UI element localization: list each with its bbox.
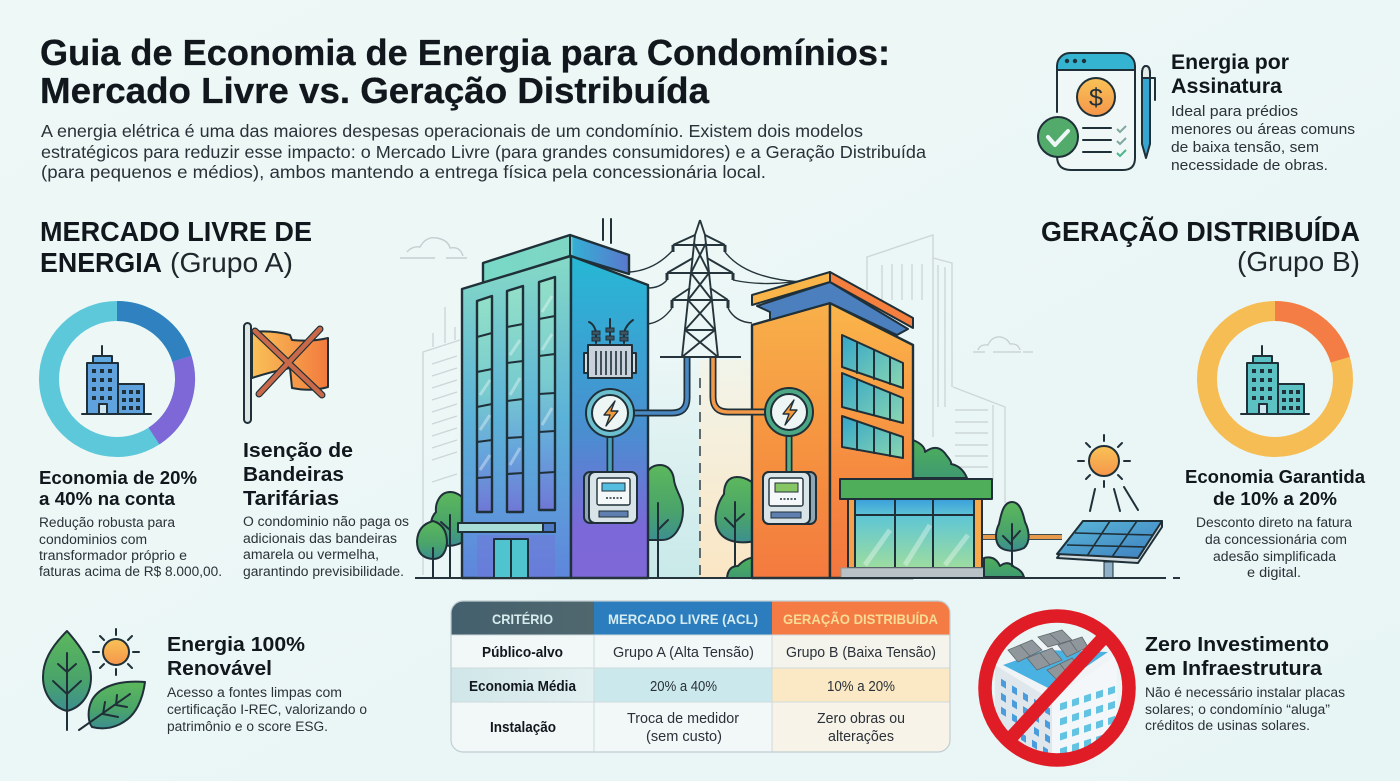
background buildings left bbox=[423, 307, 460, 575]
row: Economia Média: 10% a 20% bbox=[827, 679, 895, 695]
text block: Economia Garantida: adesão simplificada bbox=[1213, 549, 1336, 564]
windows row 1 bbox=[842, 335, 903, 388]
text block: Isenção de Bandeiras: adicionais das bandeiras bbox=[243, 531, 397, 546]
text block: Economia 20 a 40: faturas acima de R$ 8.000,00. bbox=[39, 564, 222, 579]
row: Instalação: Instalação bbox=[490, 720, 556, 736]
donut chart: Geração Distribuída bbox=[1207, 311, 1343, 447]
blue pipe to tower bbox=[610, 358, 687, 472]
windows column 2 bbox=[507, 286, 523, 512]
tree: middle right bbox=[716, 477, 760, 578]
text block: Energia por Assinatura bbox=[1171, 51, 1355, 174]
icon: blue buildings bbox=[82, 346, 151, 414]
text block: Energia por Assinatura: Ideal para prédios bbox=[1171, 104, 1298, 120]
central illustration: buildings and grid bbox=[400, 219, 1180, 578]
text block: Zero Investimento bbox=[1145, 634, 1345, 733]
tree: left rear bbox=[431, 492, 466, 578]
icon: subscription document bbox=[1038, 53, 1155, 170]
cloud left bbox=[400, 238, 467, 258]
text block: Isenção de Bandeiras: amarela ou vermelha, bbox=[243, 547, 379, 562]
entrance canopy bbox=[458, 523, 555, 578]
windows column 3 bbox=[539, 277, 555, 510]
heading: Geração Distribuída: (Grupo B) bbox=[1237, 246, 1360, 277]
transmission tower bbox=[660, 220, 741, 357]
row: Instalação: Troca de medidor bbox=[627, 711, 739, 727]
intro paragraph: A energia elétrica é uma das maiores despesas operacionais de um condomínio. Existem dois modelos bbox=[41, 121, 863, 141]
storefront bbox=[840, 479, 992, 578]
orange pipe to tower bbox=[713, 358, 789, 472]
windows column 1 bbox=[477, 296, 492, 512]
text block: Isenção de Bandeiras bbox=[243, 439, 409, 579]
icon: transformer bbox=[584, 319, 636, 378]
power lines bbox=[630, 250, 815, 324]
tree: right bbox=[996, 502, 1029, 566]
row: Instalação bbox=[490, 711, 905, 745]
text block: Isenção de Bandeiras: O condominio não paga os bbox=[243, 514, 409, 529]
solar connection cable bbox=[983, 534, 1062, 540]
side tint panels bbox=[648, 360, 752, 578]
bush behind store bbox=[913, 440, 967, 478]
intro paragraph: (para pequenos e médios), ambos mantendo a entrega física pela concessionária local. bbox=[41, 162, 766, 182]
text block: Zero Investimento: solares; o condomínio “aluga” bbox=[1145, 702, 1330, 717]
windows row 2 bbox=[842, 373, 903, 423]
intro paragraph: estratégicos para reduzir esse impacto: o Mercado Livre (para grandes consumidores) e a Geração Distribuída bbox=[41, 142, 926, 162]
table header row bbox=[492, 610, 938, 627]
table header row: GERAÇÃO DISTRIBUÍDA bbox=[783, 610, 938, 627]
text block: Isenção de Bandeiras: garantindo previsibilidade. bbox=[243, 564, 404, 579]
blue building bbox=[458, 219, 648, 578]
text block: Economia 20 a 40: Economia de 20% bbox=[39, 468, 197, 488]
tree: middle left bbox=[640, 465, 683, 578]
icon: crossed-out flag bbox=[244, 323, 328, 423]
text block: Zero Investimento: em Infraestrutura bbox=[1145, 658, 1323, 680]
text block: Economia Garantida bbox=[1185, 467, 1366, 580]
windows row 3 bbox=[842, 416, 903, 458]
text block: Economia Garantida: da concessionária com bbox=[1205, 532, 1347, 547]
text block: Energia 100% Renovável: Acesso a fontes limpas com bbox=[167, 685, 342, 700]
text block: Isenção de Bandeiras: Bandeiras bbox=[243, 463, 344, 486]
row: Público-alvo: Público-alvo bbox=[482, 645, 563, 661]
text block: Energia 100% Renovável: patrimônio e o score ESG. bbox=[167, 719, 328, 734]
row: Instalação: alterações bbox=[828, 729, 894, 745]
heading: Geração Distribuída: GERAÇÃO DISTRIBUÍDA bbox=[1041, 216, 1360, 247]
text block: Energia por Assinatura: Assinatura bbox=[1171, 75, 1282, 98]
heading: Mercado Livre de Energia: MERCADO LIVRE DE bbox=[40, 216, 312, 247]
text block: Economia Garantida: de 10% a 20% bbox=[1213, 489, 1337, 509]
intro paragraph bbox=[41, 121, 926, 182]
heading: Geração Distribuída bbox=[1041, 216, 1360, 277]
text block: Economia 20 a 40: condominios com bbox=[39, 532, 147, 547]
heading: Mercado Livre de Energia bbox=[40, 216, 312, 278]
ground line bbox=[415, 577, 1180, 579]
icon: prohibited rooftop solar bbox=[985, 616, 1129, 775]
text block: Isenção de Bandeiras: Isenção de bbox=[243, 439, 353, 462]
row: Instalação: Zero obras ou bbox=[817, 711, 905, 727]
row: Instalação: (sem custo) bbox=[646, 729, 722, 745]
row: Público-alvo bbox=[482, 645, 936, 661]
row: Economia Média: 20% a 40% bbox=[650, 679, 717, 695]
comparison table bbox=[451, 601, 950, 752]
text block: Energia por Assinatura: Energia por bbox=[1171, 51, 1289, 74]
table header row: MERCADO LIVRE (ACL) bbox=[608, 611, 758, 627]
cloud right bbox=[973, 337, 1033, 352]
text block: Isenção de Bandeiras: Tarifárias bbox=[243, 487, 339, 510]
text block: Energia por Assinatura: necessidade de obras. bbox=[1171, 158, 1328, 174]
text block: Energia 100% Renovável: Energia 100% bbox=[167, 634, 305, 656]
table header row: CRITÉRIO bbox=[492, 611, 553, 627]
text block: Energia 100% Renovável bbox=[167, 634, 367, 734]
icon: blue electric meter bbox=[584, 472, 637, 523]
text block: Economia Garantida: Desconto direto na fatura bbox=[1196, 515, 1353, 530]
text block: Energia por Assinatura: de baixa tensão, sem bbox=[1171, 140, 1319, 156]
text block: Economia 20 a 40 bbox=[39, 468, 222, 579]
text block: Economia 20 a 40: a 40% na conta bbox=[39, 489, 176, 509]
text block: Zero Investimento: Não é necessário instalar placas bbox=[1145, 685, 1345, 700]
text block: Economia 20 a 40: transformador próprio e bbox=[39, 548, 187, 563]
text block: Zero Investimento: créditos de usinas solares. bbox=[1145, 718, 1310, 733]
icon: teal buildings bbox=[1241, 346, 1309, 414]
heading: Mercado Livre de Energia: ENERGIA bbox=[40, 247, 162, 278]
text block: Economia 20 a 40: Redução robusta para bbox=[39, 515, 175, 530]
background buildings right bbox=[867, 235, 1005, 503]
row: Público-alvo: Grupo A (Alta Tensão) bbox=[613, 645, 754, 661]
text block: Energia por Assinatura: menores ou áreas comuns bbox=[1171, 122, 1355, 138]
text block: Economia Garantida: e digital. bbox=[1247, 565, 1301, 580]
icon: sun with rays bbox=[1078, 435, 1138, 511]
text block: Economia Garantida: Economia Garantida bbox=[1185, 467, 1366, 487]
text block: Energia 100% Renovável: certificação I-REC, valorizando o bbox=[167, 702, 367, 717]
icon: green electric meter bbox=[763, 472, 816, 524]
text block: Energia 100% Renovável: Renovável bbox=[167, 658, 272, 680]
icon: leaves and sun bbox=[43, 629, 145, 730]
title: Guia de Economia de Energia para Condomínios: bbox=[40, 32, 890, 73]
icon: orange lightning meter bbox=[765, 388, 813, 436]
bush near store bbox=[984, 557, 1024, 577]
row: Economia Média bbox=[469, 679, 895, 695]
row: Economia Média: Economia Média bbox=[469, 679, 577, 695]
icon: blue lightning meter bbox=[586, 389, 634, 437]
icon: solar panel bbox=[1057, 521, 1162, 578]
tree: left front bbox=[417, 521, 447, 578]
orange building bbox=[752, 272, 913, 578]
title bbox=[40, 32, 890, 111]
title: Mercado Livre vs. Geração Distribuída bbox=[40, 70, 710, 111]
row: Público-alvo: Grupo B (Baixa Tensão) bbox=[786, 645, 936, 661]
donut chart: Mercado Livre bbox=[49, 311, 185, 447]
text block: Zero Investimento: Zero Investimento bbox=[1145, 634, 1329, 656]
heading: Mercado Livre de Energia: (Grupo A) bbox=[170, 247, 293, 278]
icon: subscription document: $ bbox=[1089, 84, 1103, 112]
